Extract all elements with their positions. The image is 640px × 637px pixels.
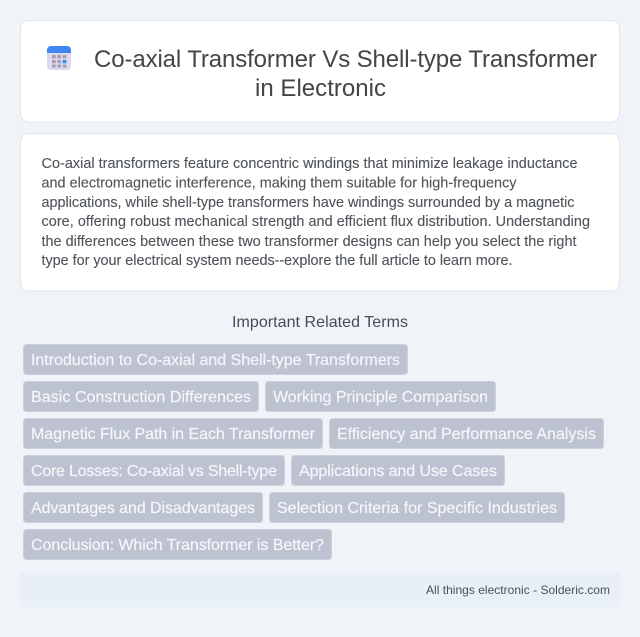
tag: Working Principle Comparison (273, 389, 488, 406)
icon: calendar (47, 46, 71, 70)
tag: Introduction to Co-axial and Shell-type Transformers (31, 352, 400, 369)
tag (24, 456, 284, 486)
text block: description: type for your electrical system needs--explore the full article to learn more. (42, 253, 512, 269)
text block: description: and electromagnetic interference, making them suitable for high-frequency (42, 176, 517, 192)
tag (24, 418, 322, 448)
tag: Magnetic Flux Path in Each Transformer (31, 426, 316, 443)
text block: description (42, 156, 590, 269)
text block: description: the differences between these two transformer designs can help you select the right (42, 234, 576, 250)
title: in Electronic (255, 75, 386, 102)
tag (24, 492, 262, 522)
tag: Basic Construction Differences (31, 389, 251, 406)
panel: header (20, 20, 620, 122)
tag (330, 418, 604, 448)
tag (24, 382, 258, 412)
tag (24, 344, 408, 374)
tag (266, 382, 496, 412)
tag (270, 492, 564, 522)
panel: description (20, 134, 620, 291)
text block: description: applications, while shell-type transformers have windings surrounded by a magnetic (42, 195, 574, 211)
footer (20, 573, 620, 607)
tag (24, 530, 332, 560)
tag: Advantages and Disadvantages (31, 500, 255, 517)
title: Co-axial Transformer Vs Shell-type Transformer (94, 46, 597, 73)
tag: Efficiency and Performance Analysis (337, 426, 596, 443)
footer text: All things electronic - Solderic.com (426, 583, 610, 597)
text block: description: core, offering robust mechanical strength and efficient flux distribution. Understanding (42, 214, 590, 230)
text block: description: Co-axial transformers feature concentric windings that minimize leakage inductance (42, 156, 578, 172)
tag: Applications and Use Cases (299, 463, 497, 480)
tag: Core Losses: Co-axial vs Shell-type (31, 463, 277, 480)
tag: Selection Criteria for Specific Industries (277, 500, 557, 517)
tag list (24, 344, 604, 560)
tag (292, 456, 504, 486)
tag: Conclusion: Which Transformer is Better? (31, 537, 324, 554)
title (94, 46, 597, 102)
heading: related terms: Important Related Terms (232, 314, 408, 331)
